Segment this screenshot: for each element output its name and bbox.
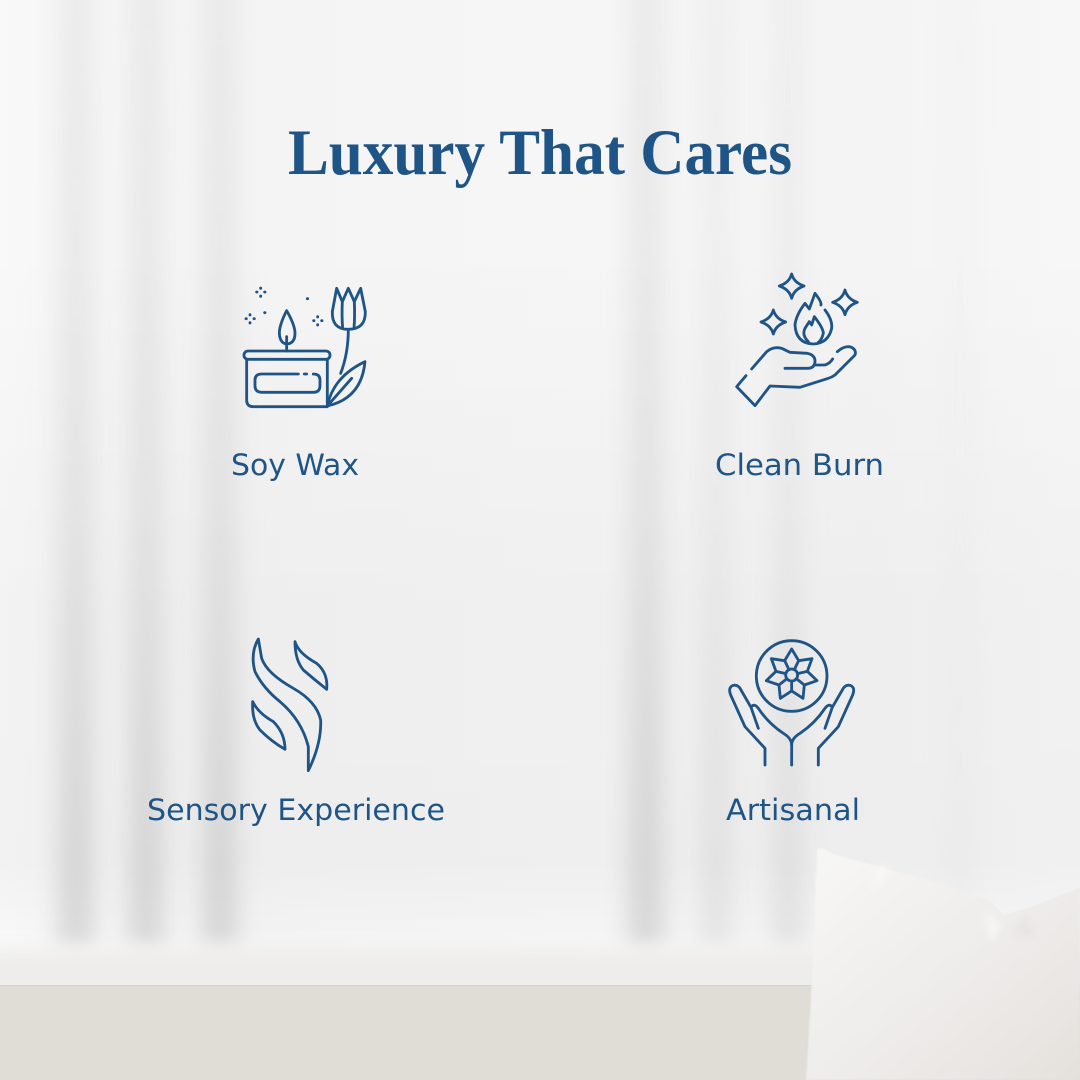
item: soy wax: [231, 288, 365, 482]
label: soy wax: Soy Wax: [231, 448, 359, 482]
icon: candle and tulip: [244, 288, 365, 407]
item: sensory experience: [147, 639, 445, 827]
label: clean burn: Clean Burn: [715, 448, 884, 482]
label: artisanal: Artisanal: [726, 793, 860, 827]
pillow: [806, 848, 1080, 1080]
icon: hand holding flame: [737, 274, 857, 406]
item: clean burn: [715, 274, 884, 482]
title: Luxury That Cares: [288, 117, 792, 189]
icon: scent wisps: [253, 639, 327, 771]
sofa: [0, 950, 1080, 1080]
item: artisanal: [726, 641, 860, 827]
label: sensory experience: Sensory Experience: [147, 793, 445, 827]
icon: hands holding flower: [730, 641, 854, 765]
